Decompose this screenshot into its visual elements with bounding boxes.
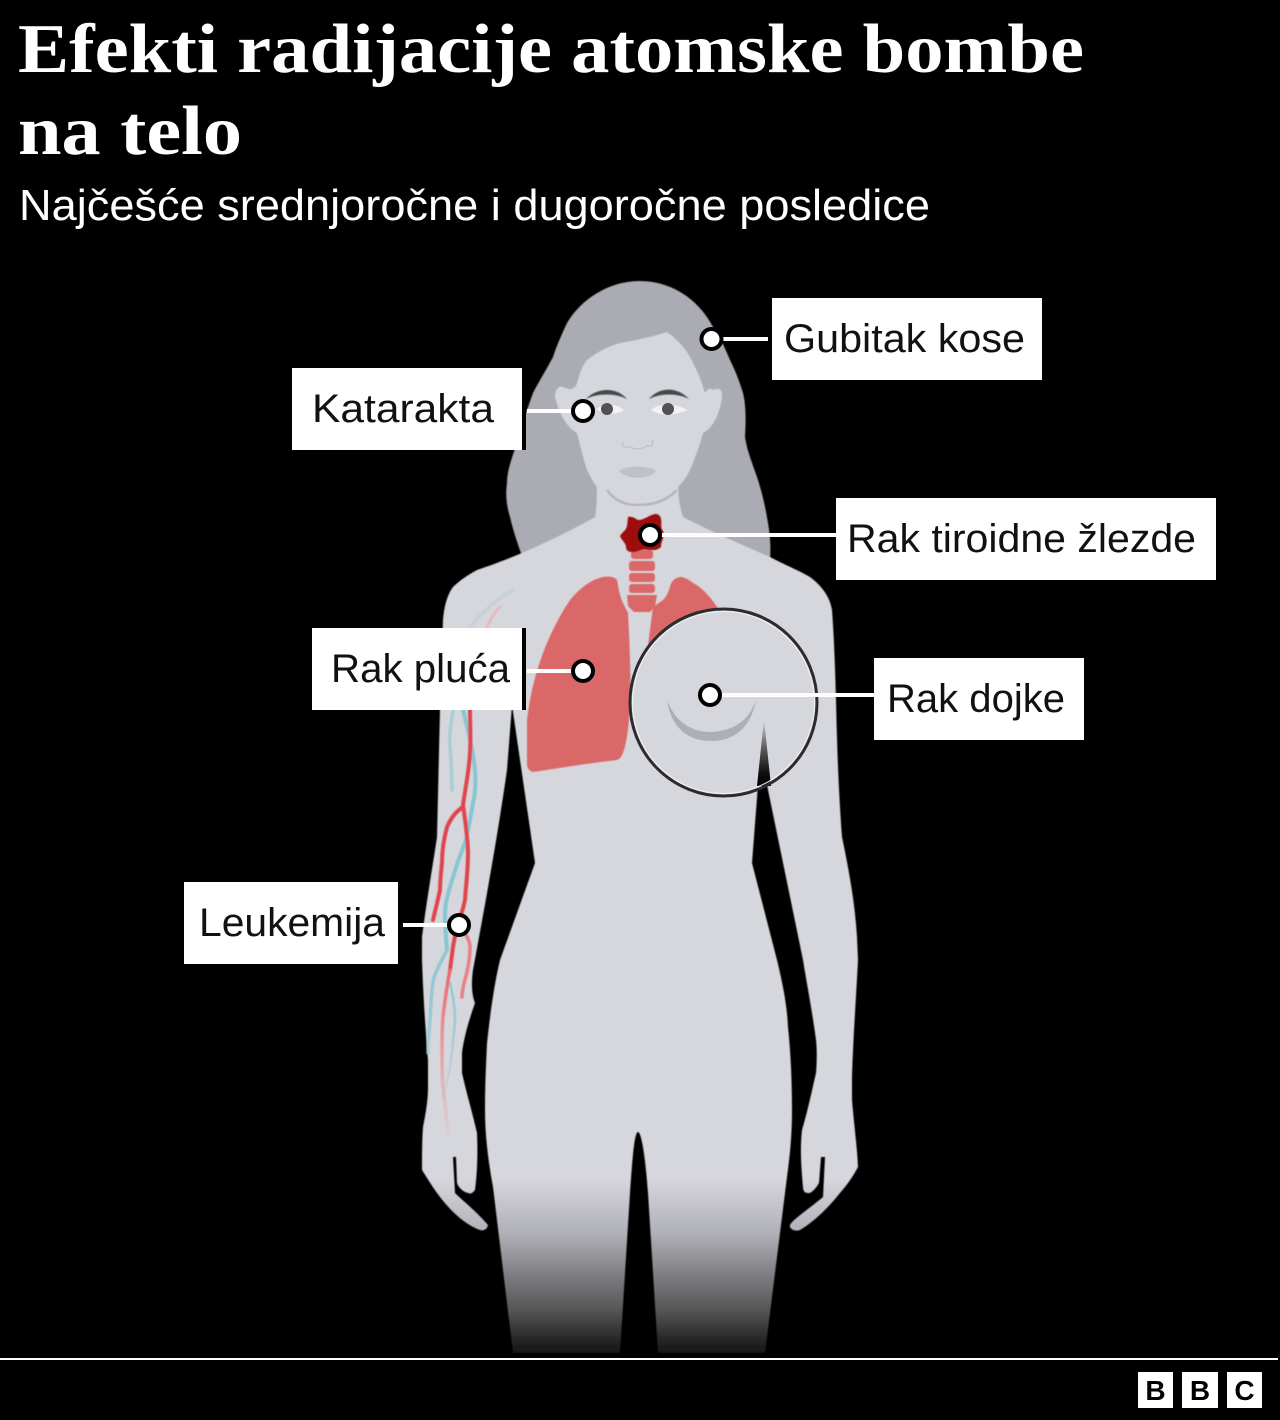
label: Leukemija: Leukemija (199, 901, 386, 945)
body silhouette (422, 487, 858, 1353)
BBC logo: B (1190, 1375, 1210, 1406)
label: Leukemija (184, 882, 469, 964)
label: Rak tiroidne žlezde: Rak tiroidne žlezde (847, 517, 1196, 561)
human figure (422, 281, 858, 1353)
thyroid tumour (620, 514, 664, 552)
eyes (596, 403, 687, 415)
label: Rak dojke: Rak dojke (887, 677, 1065, 721)
BBC logo: B (1145, 1375, 1166, 1406)
label: Katarakta: Katarakta (312, 387, 495, 431)
BBC logo: C (1234, 1375, 1255, 1406)
breast close-up circle (630, 609, 817, 796)
blood vessels (428, 590, 513, 1133)
label: Gubitak kose (702, 298, 1042, 380)
BBC logo (1138, 1372, 1262, 1408)
label: Rak dojke (700, 658, 1084, 740)
label: Rak pluća (312, 628, 593, 710)
title: Efekti radijacije atomske bombe (18, 11, 1084, 88)
face (555, 332, 722, 520)
lips (619, 466, 656, 478)
eyebrows (586, 390, 689, 399)
trachea (627, 550, 657, 612)
label: Rak tiroidne žlezde (640, 498, 1216, 580)
title (18, 11, 1084, 170)
nose (623, 440, 653, 449)
subtitle: Najčešće srednjoročne i dugoročne posledice (19, 181, 930, 230)
footer rule (0, 1358, 1278, 1360)
hair (506, 281, 770, 560)
breast outline (667, 700, 756, 741)
lungs (527, 577, 720, 772)
label: Rak pluća: Rak pluća (331, 647, 511, 691)
title: na telo (18, 93, 242, 170)
label: Katarakta (292, 368, 593, 450)
chin line (607, 490, 677, 505)
label: Gubitak kose: Gubitak kose (784, 317, 1025, 361)
